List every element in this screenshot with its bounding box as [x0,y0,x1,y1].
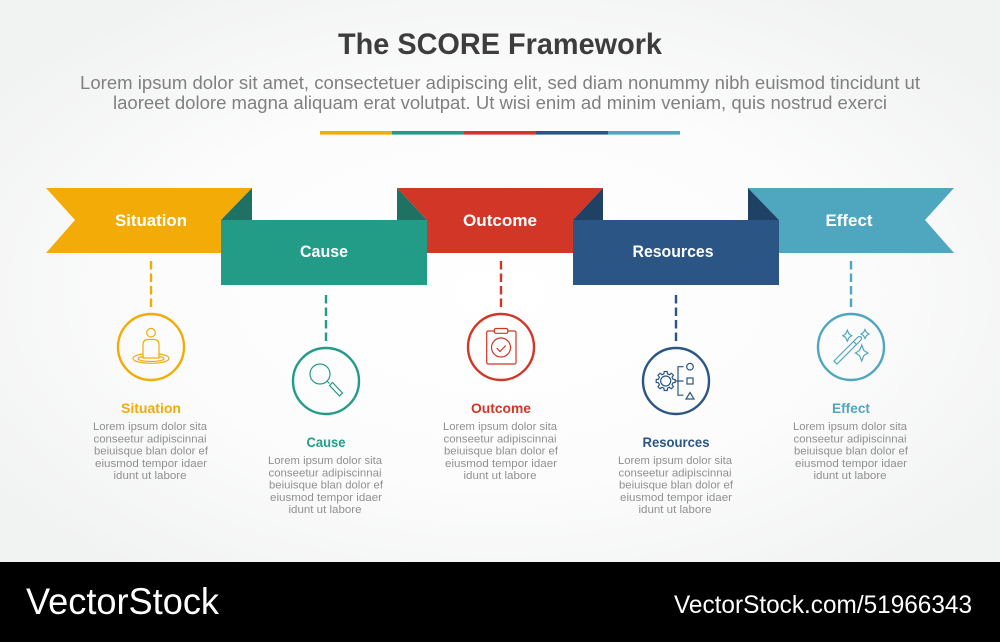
description: Resources [618,455,734,516]
description: Effect: Lorem ipsum dolor sita [793,421,908,433]
description: Outcome: idunt ut labore [464,470,536,482]
description: Cause: beiuisque blan dolor ef [269,480,384,492]
description: Resources: beiuisque blan dolor ef [619,480,734,492]
ribbon banner: Cause [221,220,427,285]
description: Effect: idunt ut labore [814,470,886,482]
ribbon banner: Outcome: Outcome [463,211,537,230]
description: Effect: beiuisque blan dolor ef [794,446,909,458]
connector: Outcome [500,261,502,307]
ribbon banner: Outcome [397,188,603,253]
column: Resources [618,295,734,516]
description: Cause: conseetur adipiscinnai [268,468,382,480]
icon: magnifying glass [293,348,359,414]
description: Resources: conseetur adipiscinnai [618,468,732,480]
connector: Cause [325,295,327,341]
description: Cause: idunt ut labore [288,504,362,516]
heading: Cause: Cause [306,434,346,450]
column: Outcome [443,261,559,482]
ribbon banner: Situation [46,188,252,253]
description: Effect [793,421,909,482]
description: Outcome: beiuisque blan dolor ef [444,446,559,458]
footer bar [0,562,1000,642]
description: Outcome: conseetur adipiscinnai [444,434,556,446]
description: Situation: eiusmod tempor idaer [95,458,207,470]
connector: Effect [850,261,852,307]
description: Situation: conseetur adipiscinnai [94,434,206,446]
icon: gear with shapes [643,348,709,414]
description: Situation [93,421,209,482]
colour divider bar [320,131,680,135]
heading: Situation: Situation [121,400,181,416]
description: Cause [268,455,384,516]
footer logo: VectorStock [26,581,219,622]
heading: Resources: Resources [642,434,710,450]
description: Cause: Lorem ipsum dolor sita [268,455,383,467]
description: Effect: eiusmod tempor idaer [795,458,907,470]
description: Resources: eiusmod tempor idaer [620,492,732,504]
connector: Resources [675,295,677,341]
icon: person in ripples [118,314,184,380]
description: Outcome: eiusmod tempor idaer [445,458,557,470]
title: The SCORE Framework [338,28,662,61]
description: Situation: beiuisque blan dolor ef [94,446,209,458]
heading: Outcome: Outcome [471,400,531,416]
ribbon banner: Situation: Situation [115,211,187,230]
footer image reference: VectorStock.com/51966343 [674,591,972,619]
ribbon banner: Resources: Resources [632,242,714,261]
ribbon banner: Effect [748,188,954,253]
column: Effect [793,261,909,482]
ribbon banner: Cause: Cause [300,242,348,261]
ribbon banner: Resources [573,220,779,285]
subtitle text: Lorem ipsum dolor sit amet, consectetuer adipiscing elit, sed diam nonummy nibh euismod tincidunt ut [80,73,920,93]
connector: Situation [150,261,152,307]
subtitle text: laoreet dolore magna aliquam erat volutpat. Ut wisi enim ad minim veniam, quis nostrud exerci [113,93,887,113]
description: Situation: Lorem ipsum dolor sita [93,421,208,433]
description: Resources: Lorem ipsum dolor sita [618,455,733,467]
description: Outcome [443,421,559,482]
description: Effect: conseetur adipiscinnai [794,434,906,446]
icon: clipboard with check [468,314,534,380]
description: Cause: eiusmod tempor idaer [270,492,382,504]
description: Resources: idunt ut labore [638,504,712,516]
ribbon banner: Effect: Effect [826,211,873,230]
description: Outcome: Lorem ipsum dolor sita [443,421,558,433]
column: Cause [268,295,384,516]
description: Situation: idunt ut labore [114,470,186,482]
icon: magic wand with sparkles [818,314,884,380]
column: Situation [93,261,209,482]
heading: Effect: Effect [832,400,870,416]
subtitle text [80,73,920,113]
